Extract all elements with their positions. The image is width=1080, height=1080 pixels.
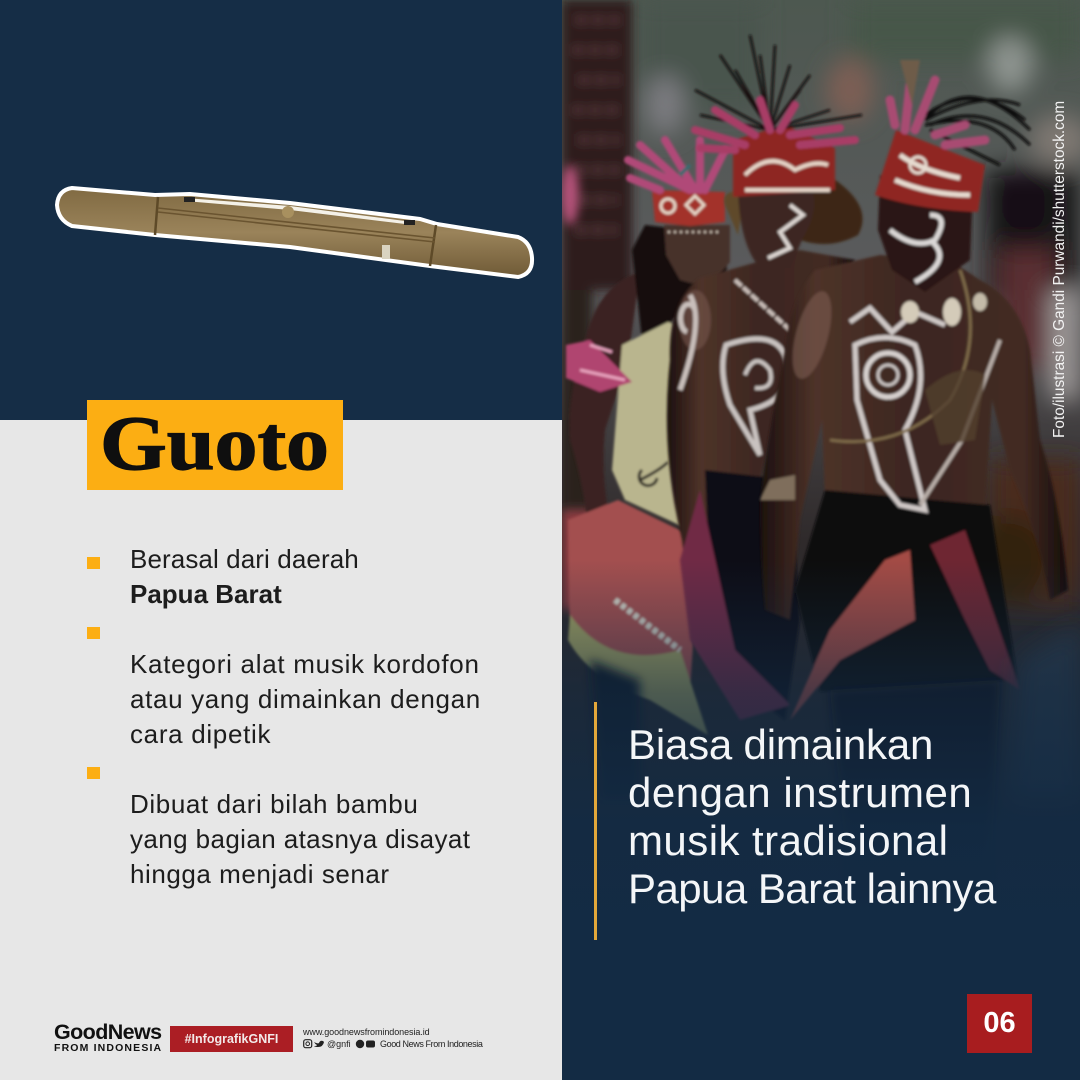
footer contact info xyxy=(303,1027,483,1049)
text block: category xyxy=(130,649,481,749)
caption text xyxy=(628,721,996,912)
caption text: Papua Barat lainnya xyxy=(628,865,996,912)
bullet marker 1 xyxy=(87,557,100,569)
photo background crowd xyxy=(562,0,1080,1080)
navy base xyxy=(562,938,1080,1080)
footer contact info: @gnfi xyxy=(327,1039,351,1049)
hashtag badge: #InfografikGNFI xyxy=(185,1032,278,1046)
panel: navy top background xyxy=(0,0,562,420)
bullet marker 3 xyxy=(87,767,100,779)
text block: origin xyxy=(130,544,359,609)
text block: origin: Papua Barat xyxy=(130,579,282,609)
text block: material: Dibuat dari bilah bambu xyxy=(130,789,418,819)
tree trunk xyxy=(562,0,632,510)
left edge costume details xyxy=(561,165,598,610)
text block: category: Kategori alat musik kordofon xyxy=(130,649,480,679)
front male dancer xyxy=(760,60,1068,720)
page number badge: 06 xyxy=(983,1007,1016,1039)
dancer legs xyxy=(590,660,1000,900)
text block: material: hingga menjadi senar xyxy=(130,859,390,889)
footer contact info: www.goodnewsfromindonesia.id xyxy=(303,1027,430,1037)
footer logo: GoodNews xyxy=(54,1020,162,1044)
text block: material: yang bagian atasnya disayat xyxy=(130,824,470,854)
ground xyxy=(1010,625,1080,800)
middle male dancer xyxy=(667,35,863,720)
text block: category: atau yang dimainkan dengan xyxy=(130,684,481,714)
bullet marker 2 xyxy=(87,627,100,639)
title: Guoto xyxy=(100,400,329,486)
panel: photo of Papuan dancers xyxy=(562,0,1080,1080)
vertical accent rule xyxy=(594,702,597,940)
illustration: guoto bamboo instrument xyxy=(55,186,534,279)
social icons xyxy=(303,1039,375,1048)
text block: origin: Berasal dari daerah xyxy=(130,544,359,574)
hashtag badge xyxy=(170,1026,293,1052)
caption text: musik tradisional xyxy=(628,817,948,864)
woman dancer xyxy=(566,140,730,735)
panel: light grey background xyxy=(0,420,562,1080)
text block: category: cara dipetik xyxy=(130,719,271,749)
text: Foto/ilustrasi © Gandi Purwandi/shutterstock.com xyxy=(1051,101,1068,438)
caption text: dengan instrumen xyxy=(628,769,972,816)
caption text: Biasa dimainkan xyxy=(628,721,933,768)
dark navy fade overlay xyxy=(562,560,1080,940)
footer logo: FROM INDONESIA xyxy=(54,1042,162,1054)
title badge xyxy=(87,400,343,490)
page number badge xyxy=(967,994,1032,1053)
text block: material xyxy=(130,789,470,889)
footer contact info: Good News From Indonesia xyxy=(380,1039,482,1049)
